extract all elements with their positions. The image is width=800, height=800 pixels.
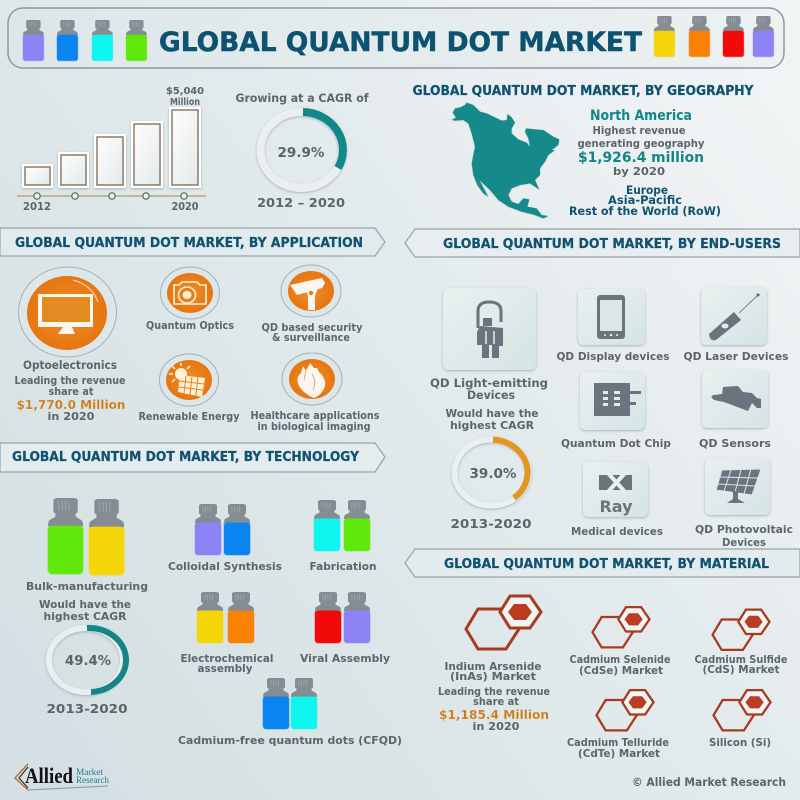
icon: heart (282, 353, 342, 405)
tile labels (430, 376, 548, 432)
logo: Research (76, 776, 109, 786)
label: QD based security (262, 321, 362, 334)
icon: camera (160, 267, 220, 319)
label: Cadmium Telluride (567, 736, 669, 749)
InAs text: share at (473, 695, 519, 708)
icon: CdS hexagons (713, 610, 770, 650)
logo (15, 763, 109, 790)
tile labels: Devices (467, 388, 515, 402)
label: Colloidal Synthesis (168, 560, 282, 573)
bar labels: $5,040 (166, 86, 204, 97)
bulk text: Would have the (39, 598, 131, 611)
bottles: fabrication (313, 500, 371, 552)
banner: end-users: GLOBAL QUANTUM DOT MARKET, BY END-USERS (443, 237, 781, 252)
bar labels: 2012 (23, 200, 51, 213)
North America text (578, 108, 704, 178)
logo: Allied (25, 763, 73, 788)
label: Viral Assembly (300, 652, 390, 665)
optoelectronics text: Optoelectronics (23, 358, 117, 372)
bottles: cadmium-free (262, 678, 318, 730)
panel: material (405, 549, 800, 760)
banner: end-users (405, 229, 800, 257)
bar labels (23, 86, 204, 213)
panel: technology (0, 443, 402, 747)
label (250, 409, 380, 433)
other regions (569, 183, 721, 218)
banner: technology (0, 443, 385, 472)
North America text: generating geography (578, 137, 704, 150)
other regions: Europe (626, 183, 668, 197)
logo: Market (76, 768, 103, 778)
label: (CdTe) Market (578, 747, 660, 760)
banner: technology: GLOBAL QUANTUM DOT MARKET, BY TECHNOLOGY (12, 450, 360, 465)
banner: material (405, 549, 800, 577)
label (180, 652, 274, 675)
label: Electrochemical (180, 652, 274, 665)
bars (23, 108, 200, 187)
InAs text: (InAs) Market (450, 670, 536, 683)
label (694, 653, 788, 676)
other regions: Asia-Pacific (608, 193, 682, 207)
bar labels: Million (170, 97, 200, 108)
label: Quantum Dot Chip (561, 437, 671, 450)
icon: solar panel (160, 354, 218, 406)
CAGR donut 49.4% (46, 628, 128, 716)
label: Quantum Optics (146, 319, 234, 332)
bulk text (26, 580, 148, 623)
bottles: colloidal synthesis (194, 504, 251, 556)
header panel (8, 8, 784, 68)
label: QD Display devices (556, 350, 670, 363)
label: Medical devices (571, 525, 663, 538)
bottles left (22, 20, 147, 61)
label: assembly (198, 662, 252, 675)
label: QD Sensors (699, 437, 771, 450)
icon: CdSe hexagons (593, 607, 650, 647)
tile: photovoltaic (705, 458, 770, 515)
label: (CdS) Market (702, 663, 780, 676)
label: Fabrication (310, 560, 376, 573)
tile: chip (580, 372, 645, 430)
tile: QD light-emitting (443, 288, 536, 370)
banner: application (0, 228, 385, 256)
North America text: North America (590, 108, 692, 124)
CAGR donut 29.9%: 2012 – 2020 (257, 196, 345, 210)
geography heading: GLOBAL QUANTUM DOT MARKET, BY GEOGRAPHY (412, 84, 754, 99)
icon: monitor (18, 267, 116, 357)
CAGR donut 49.4%: 49.4% (65, 654, 111, 669)
CAGR donut 29.9% (236, 91, 369, 210)
optoelectronics text (14, 358, 126, 423)
bottles: electrochemical (196, 592, 255, 644)
optoelectronics text: Leading the revenue (14, 374, 126, 387)
icon: Si hexagons (714, 690, 771, 730)
InAs text: Indium Arsenide (444, 660, 542, 673)
other regions: Rest of the World (RoW) (569, 204, 721, 218)
InAs text: in 2020 (472, 720, 520, 733)
bottles right (653, 16, 774, 57)
optoelectronics text: in 2020 (48, 410, 95, 423)
icon: security camera (281, 265, 341, 317)
label: & surveillance (272, 331, 350, 344)
North America text: Highest revenue (592, 124, 686, 137)
label: QD Laser Devices (684, 350, 789, 363)
icon: CdTe hexagons (597, 690, 654, 730)
icon: InAs hexagons (466, 596, 541, 649)
label: in biological imaging (258, 420, 370, 433)
label: Renewable Energy (138, 410, 240, 423)
CAGR donut 39.0%: 2013-2020 (450, 517, 532, 531)
bottles: bulk-manufacturing (47, 498, 125, 576)
panel: geography (412, 84, 754, 218)
bar chart: market growth (17, 86, 206, 213)
tile labels: QD Light-emitting (430, 376, 548, 390)
CAGR donut 49.4%: 2013-2020 (46, 702, 128, 716)
timeline (17, 193, 206, 199)
North America text: $1,926.4 million (578, 150, 704, 166)
label (567, 736, 669, 760)
label: (CdSe) Market (579, 664, 663, 677)
panel: end-users (405, 229, 800, 549)
optoelectronics text: $1,770.0 Million (16, 398, 126, 412)
label: Cadmium-free quantum dots (CFQD) (178, 734, 402, 747)
label (262, 321, 362, 344)
North America text: by 2020 (613, 165, 665, 178)
InAs text: $1,185.4 Million (439, 708, 549, 722)
CAGR donut 29.9%: Growing at a CAGR of (236, 91, 369, 105)
bulk text: highest CAGR (44, 610, 127, 623)
InAs text: Leading the revenue (438, 685, 550, 698)
banner: material: GLOBAL QUANTUM DOT MARKET, BY MATERIAL (444, 557, 769, 572)
tile labels: highest CAGR (450, 419, 535, 432)
InAs text (438, 660, 550, 733)
panel: application (0, 228, 385, 433)
CAGR donut 29.9%: 29.9% (278, 146, 324, 161)
CAGR donut 39.0%: 39.0% (470, 467, 516, 482)
label: Silicon (Si) (709, 736, 771, 749)
header (8, 8, 784, 68)
label (695, 523, 793, 549)
label: QD Photovoltaic (695, 523, 793, 536)
label: Healthcare applications (250, 409, 380, 422)
label: Cadmium Selenide (570, 653, 670, 666)
title: GLOBAL QUANTUM DOT MARKET (159, 27, 643, 58)
tile: laser (701, 287, 767, 345)
map: North America (445, 103, 559, 218)
bulk text: Bulk-manufacturing (26, 580, 148, 593)
banner: application: GLOBAL QUANTUM DOT MARKET, BY APPLICATION (15, 236, 363, 251)
tile: x-ray: Ray (600, 497, 633, 516)
label: Cadmium Sulfide (694, 653, 788, 666)
tile: display (578, 289, 645, 345)
label (570, 653, 670, 677)
CAGR donut 39.0% (450, 440, 532, 531)
tile: x-ray (583, 462, 648, 517)
bar labels: 2020 (172, 200, 199, 213)
optoelectronics text: share at (48, 385, 94, 398)
tile: sensors (702, 370, 768, 428)
tile labels: Would have the (446, 407, 538, 420)
bottles: viral assembly (314, 592, 371, 644)
copyright: © Allied Market Research (632, 775, 786, 789)
label: Devices (722, 536, 766, 549)
